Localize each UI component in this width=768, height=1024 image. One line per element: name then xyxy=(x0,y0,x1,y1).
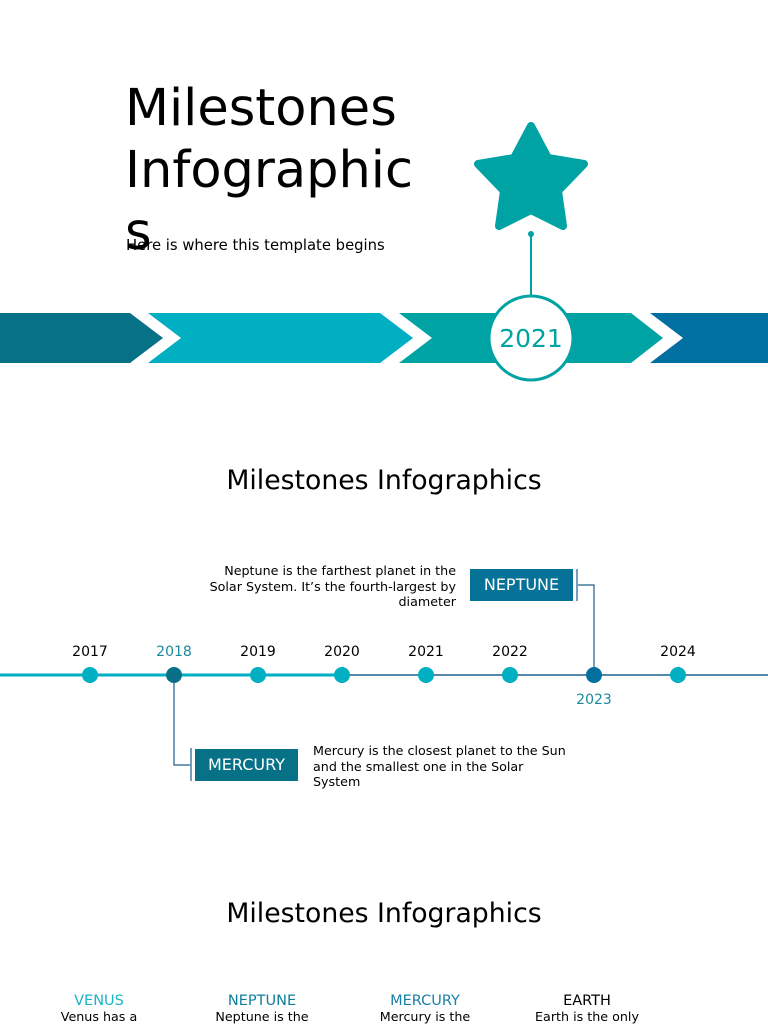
label: MERCURY xyxy=(195,749,298,781)
column mercury: Mercury is the xyxy=(380,1009,470,1024)
columns xyxy=(60,993,639,1024)
chevron segments xyxy=(0,313,768,363)
label: MERCURY: MERCURY xyxy=(208,755,285,774)
timeline xyxy=(0,569,768,781)
label: NEPTUNE xyxy=(470,569,573,601)
subtitle: Here is where this template begins xyxy=(126,237,385,254)
year labels: 2019 xyxy=(240,644,276,660)
column mercury: MERCURY xyxy=(390,993,460,1009)
column venus: VENUS xyxy=(74,993,124,1009)
year labels: 2020 xyxy=(324,644,360,660)
column earth xyxy=(535,993,639,1024)
connector neptune xyxy=(578,585,594,675)
column mercury xyxy=(380,993,470,1024)
column venus: Venus has a xyxy=(61,1009,137,1024)
text: mercury: Mercury is the closest planet to the Sun and the smallest one in the Solar System xyxy=(313,743,566,789)
year labels: 2024 xyxy=(660,644,696,660)
year circle 2021 xyxy=(489,296,573,380)
title: Infographic xyxy=(125,141,413,200)
year labels: 2021 xyxy=(408,644,444,660)
column earth: EARTH xyxy=(563,993,611,1009)
dots xyxy=(82,667,686,683)
chevron band with star and year xyxy=(0,122,768,382)
column neptune: Neptune is the xyxy=(215,1009,309,1024)
label: NEPTUNE: NEPTUNE xyxy=(484,575,559,594)
year labels xyxy=(72,644,696,708)
text: neptune: Neptune is the farthest planet in the Solar System. It’s the fourth-largest by diameter xyxy=(210,563,456,609)
column earth: Earth is the only xyxy=(535,1009,639,1024)
heading 2: Milestones Infographics xyxy=(226,465,542,496)
connector mercury xyxy=(174,675,190,765)
year circle 2021: 2021 xyxy=(499,324,563,353)
column neptune: NEPTUNE xyxy=(228,993,296,1009)
column neptune xyxy=(215,993,309,1024)
title: Milestones xyxy=(125,79,397,138)
column venus xyxy=(60,993,137,1024)
heading 3: Milestones Infographics xyxy=(226,898,542,929)
icon: star xyxy=(478,126,584,296)
year labels: 2023 xyxy=(576,692,612,708)
title xyxy=(125,79,413,262)
year labels: 2022 xyxy=(492,644,528,660)
title: s xyxy=(125,203,152,262)
year labels: 2017 xyxy=(72,644,108,660)
year labels: 2018 xyxy=(156,644,192,660)
